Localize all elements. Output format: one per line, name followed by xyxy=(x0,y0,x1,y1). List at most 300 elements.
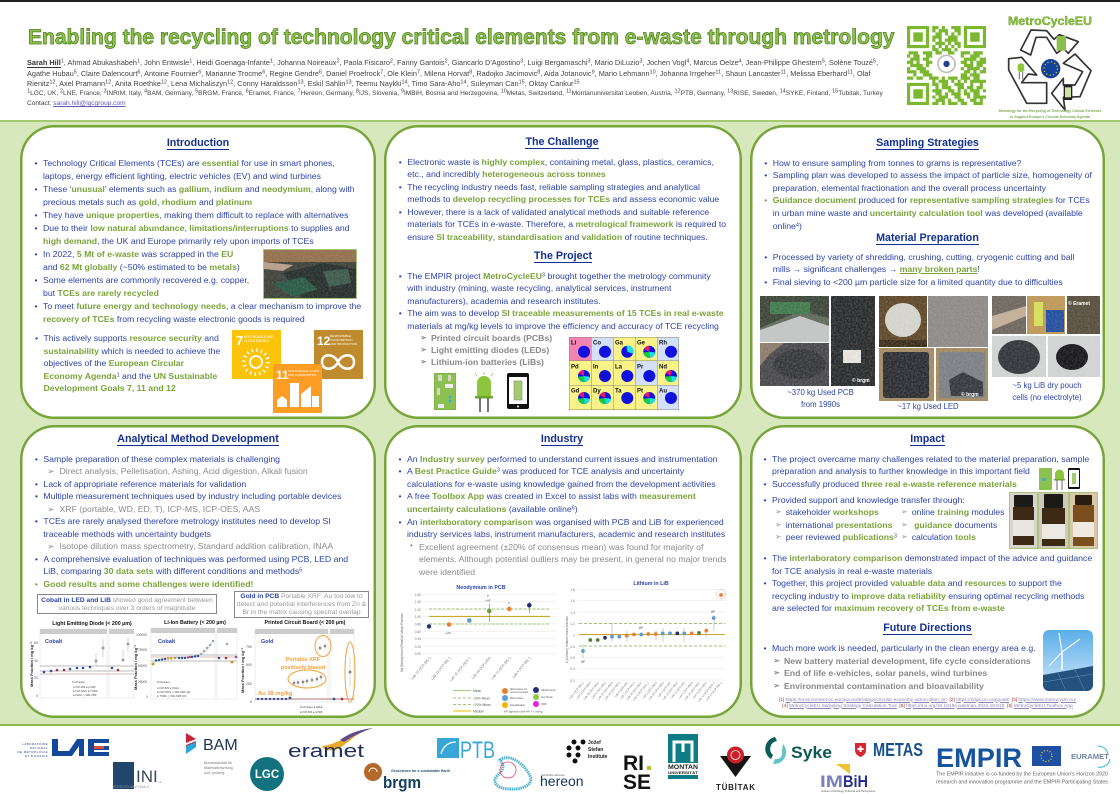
chart: lithium in LiB: 0.6 xyxy=(570,656,575,660)
text: method bullets: ➢ Isotope dilution mass spectrometry, Standard addition calibration, INAA xyxy=(47,541,333,551)
chart: neodymium in PCB: Lab 13 (ICP-MS 1 xyxy=(430,656,452,681)
text: sampling bullets: online4) xyxy=(773,221,802,231)
chart: lithium in LiB: Lab 21 (ICP-OES xyxy=(683,681,701,701)
text: introduction bullets: high demand, the UK and Europe primarily rely upon imports of TCEs xyxy=(43,236,314,246)
text: impact conclusions: recycling industry to improve data reliability ensuring optimal recycling methods xyxy=(772,591,1084,601)
logo: IMBiH: BiH xyxy=(843,772,868,791)
chart: PCB gold: 250 xyxy=(246,682,252,686)
caption: used PCB: from 1990s xyxy=(801,400,840,408)
text: introduction bullets: Technology Critical Elements (TCEs) are essential for use in smart phones, xyxy=(43,158,335,168)
logo: Montanuniversität Leoben: MONTAN xyxy=(668,764,699,771)
chart: LiB cobalt: Li-Ion Battery (< 200 µm) xyxy=(164,620,226,626)
chart: neodymium in PCB: 0.00 xyxy=(415,652,421,656)
chart: LiB cobalt: 25000 xyxy=(138,680,147,684)
text: method bullets: Multiple measurement techniques used by industry including portable devices xyxy=(43,491,341,501)
text: sustainability bullet: objectives of the European Circular xyxy=(44,358,184,368)
text: EMPIR funding statement xyxy=(936,772,1109,786)
chart: lithium in LiB: Lab 12 (ICP-OES 1 xyxy=(697,681,716,703)
panel: the challenge and the project xyxy=(384,125,742,419)
logo: INRIM: LE xyxy=(158,780,162,784)
text: impact conclusions: for TCE analysis in real e-waste materials xyxy=(772,566,932,576)
icon: SDG 7 xyxy=(232,330,281,379)
photos: LiB pouch cells: © Eramet xyxy=(1068,300,1090,307)
text: knowledge transfer list, second column: calculation tools xyxy=(912,532,976,542)
text: preparation bullets: mills → significant challenges → many broken parts! xyxy=(773,264,980,274)
chart: lithium in LiB: 1.6 xyxy=(570,599,575,603)
logo: Eramet xyxy=(288,728,373,761)
text: method bullets: A comprehensive evaluation of techniques was performed using PCB, LED and xyxy=(43,554,348,564)
chart: LED cobalt: 0 xyxy=(36,694,38,698)
text: preparation bullets: Final sieving to <200 µm particle size for a limited quantity due to difficulties xyxy=(773,277,1063,287)
text: impact bullets: The project overcame many challenges related to the material preparation, sample xyxy=(772,454,1089,464)
icon: LED xyxy=(474,372,494,412)
caption: LiB pouch cells: cells (no electrolyte) xyxy=(1012,392,1082,402)
chart: neodymium in PCB: Lab 11 (ICP-MS 1 xyxy=(490,656,512,680)
logo: INRIM: ISTITUTO NAZIONALE xyxy=(113,785,150,789)
logo: Jozef Stefan Institute: Institute xyxy=(588,754,608,760)
text: introduction bullets: Some elements are commonly recovered e.g. copper, xyxy=(43,274,249,284)
logo: hereon xyxy=(495,758,584,789)
chart: periodic table of pies: Gd xyxy=(571,388,580,394)
callout: cobalt: various techniques over 3 orders of magnitude xyxy=(59,604,195,612)
photo: wind turbine and solar panels xyxy=(1043,630,1093,691)
legend: neodymium chart: Microwave xyxy=(510,696,524,700)
chart: LED cobalt: Cobalt xyxy=(45,639,62,645)
text: sustainability bullet: This actively supports resource security and xyxy=(44,333,219,343)
chart: neodymium in PCB: Lab 4 (ICP-MS 1 xyxy=(511,656,532,679)
caption: used LED: ~17 kg Used LED xyxy=(897,402,959,411)
text: introduction bullets: These ‘unusual’ elements such as gallium, indium and neodymium, along with xyxy=(43,184,355,194)
text: sampling bullets: preparation, elemental fractionation and the overall process uncertainty xyxy=(773,183,1046,193)
logo: PTB xyxy=(437,737,495,764)
chart: lithium in LiB: 1 xyxy=(573,634,575,638)
chart: LED cobalt: ● INAA ◇ WD-XRF xyxy=(73,693,97,697)
chart: lithium in LiB: Lab 5 (ICP-OES xyxy=(590,681,607,700)
chart: neodymium in PCB: Neodymium in PCB xyxy=(456,585,506,591)
text: challenge bullets: etc., and incredibly heterogeneous across tonnes xyxy=(407,169,606,179)
text: EMPIR funding statement: research and innovation programme and the EMPIR Participating States xyxy=(936,780,1109,786)
text: industry bullets: uncertainty calculations (available online6) xyxy=(407,504,578,514)
chart: LED cobalt: ● ICP-OES ● TXRF xyxy=(73,689,98,693)
chart: neodymium in PCB: 0.40 xyxy=(415,637,421,641)
logo: BRGM: Geoscience for a sustainable Earth xyxy=(391,769,451,773)
chart: lithium in LiB: Lab 18 (ICP-OES xyxy=(582,681,600,701)
text: industry bullets xyxy=(398,454,727,577)
text: introduction bullets: and 62 Mt globally (~50% estimated to be metals) xyxy=(43,262,240,272)
text: project bullets: with industry (mining, waste recycling, analytical services, instrument xyxy=(407,283,671,293)
chart: LED cobalt: 60 xyxy=(34,641,38,645)
chart: PCB gold: Portable XRF xyxy=(286,657,321,663)
callout: gold: Br in the matrix causing spectral overlap xyxy=(242,609,361,616)
chart: lithium in LiB: Lab 1 (ICP-MS 2 xyxy=(619,681,636,700)
text: knowledge transfer list, second column: online training modules xyxy=(912,507,1004,517)
text: method bullets: ➢ XRF (portable, WD, ED, T), ICP-MS, ICP-OES, AAS xyxy=(47,504,260,514)
text: industry bullets: elements. Although potential outliers may be present, in general no major trends xyxy=(419,554,727,564)
heading: Future Directions: Future Directions xyxy=(883,622,972,634)
chart: LED cobalt: 20 xyxy=(34,676,38,680)
logo: IMBiH xyxy=(820,764,876,793)
logo: EMPIR xyxy=(936,743,1110,773)
charts: interlaboratory comparison xyxy=(400,581,726,714)
text: challenge bullets: methods to develop recycling processes for TCEs and assess economic value xyxy=(407,194,719,204)
text: future directions: New battery material development, life cycle considerations xyxy=(784,656,1031,666)
text: method bullets: Good results and some challenges were identified! xyxy=(43,579,253,589)
logo: Eramet: eramet xyxy=(288,741,364,761)
heading: Analytical Method Development: Analytical Method Development xyxy=(117,433,279,445)
chart: lithium in LiB: Lab 4 (ICP-MS 1 xyxy=(568,681,585,700)
chart: lithium in LiB: HF xyxy=(639,626,643,630)
heading: The Challenge: The Challenge xyxy=(525,136,599,148)
chart: lithium in LiB: Lab 12 (ICP-OES xyxy=(661,681,679,701)
chart: periodic table of pies: Co xyxy=(593,340,601,346)
chart: neodymium in PCB: +HF xyxy=(485,598,491,602)
text: sampling bullets: in urban mine waste and uncertainty calculation tool was developed (available xyxy=(773,208,1083,218)
chart: LiB cobalt: ● ICP-MS ● INAA xyxy=(157,686,179,690)
chart: neodymium in PCB: 1.20 xyxy=(415,608,421,612)
photos: used PCB xyxy=(760,296,875,386)
chart: LiB cobalt: Mass Fraction / mg kg⁻¹ xyxy=(133,644,138,690)
photos: LiB pouch cells xyxy=(992,296,1100,377)
chart: lithium in LiB: 1.2 xyxy=(570,622,575,626)
logo: BAM: Bundesanstalt für xyxy=(204,761,233,765)
legend: neodymium chart: Microwave as xyxy=(510,687,528,691)
text: method bullets: traceable methods with uncertainty budgets xyxy=(43,529,211,539)
text: introduction bullets xyxy=(34,158,361,324)
photo: reference material bottles xyxy=(1009,492,1098,549)
logo: LGC: LGC xyxy=(255,769,279,781)
logo: TUBITAK xyxy=(716,746,755,792)
chart: lithium in LiB: 0.2 xyxy=(570,679,575,683)
text: challenge bullets: The recycling industry needs fast, reliable sampling strategies and analytical xyxy=(407,182,700,192)
caption: LiB pouch cells: ~5 kg LiB dry pouch xyxy=(1012,381,1082,390)
chart: lithium in LiB: Lab 7 (ICP-MS xyxy=(656,681,672,698)
chart: neodymium in PCB: # xyxy=(487,594,489,598)
recycling arrows with EU circle xyxy=(1008,29,1092,111)
logo: hereon: Helmholtz-Zentrum xyxy=(541,773,565,777)
text: preparation bullets: Processed by variety of shredding, crushing, cutting, cryogenic cutting and ball xyxy=(773,252,1075,262)
chart: LED cobalt: ● ICP-MS ● μXRF xyxy=(73,685,96,689)
heading: Introduction: Introduction xyxy=(167,137,229,149)
text: introduction bullets: In 2022, 5 Mt of e-waste was scrapped in the EU xyxy=(43,248,233,258)
logo: Montanuniversität Leoben xyxy=(668,734,699,779)
title: Enabling the recycling of technology critical elements from e-waste through metrology xyxy=(28,26,894,49)
text: introduction bullets: recovery of TCEs from recycling waste electronic goods is required xyxy=(43,314,305,324)
text: impact bullets: Successfully produced three real e-waste reference materials xyxy=(772,479,1017,489)
logo: BAM: und -prüfung xyxy=(204,771,224,775)
text: impact conclusions: Together, this project provided valuable data and resources to support the xyxy=(772,578,1062,588)
MetroCycleEU logo xyxy=(998,14,1102,119)
text: method bullets: LiB, comparing 30 data sets with different conditions and methods5 xyxy=(43,566,302,576)
text: project bullets: The EMPIR project MetroCycleEU3 brought together the metrology community xyxy=(407,271,711,281)
legend: neodymium chart: recommended xyxy=(510,690,528,694)
chart: neodymium in PCB: 1.60 xyxy=(415,593,421,597)
text: impact conclusions: are selected for maximum recovery of TCEs from e-waste xyxy=(772,603,1005,613)
chart: LiB cobalt: 50000 xyxy=(138,664,147,668)
text: sustainability bullet: Economy Agenda1 and the UN Sustainable xyxy=(44,370,217,380)
chart: LED cobalt: Light Emitting Diode (< 200 µm) xyxy=(52,621,132,627)
callout: gold: detect and potential interferences from Zn & xyxy=(237,601,366,608)
heading: The Project: The Project xyxy=(534,250,592,262)
icon: SDG 11: SUSTAINABLE CITIES xyxy=(288,369,319,373)
text: project bullets: manufacturers), academia and research institutes. xyxy=(407,296,600,306)
text: knowledge transfer list, second column: guidance documents xyxy=(914,520,997,530)
text: impact conclusions: The interlaboratory comparison demonstrated impact of the advice and guidance xyxy=(772,553,1092,563)
caption: LiB pouch cells xyxy=(1012,381,1082,402)
chart: lithium in LiB: Lithium in LiB xyxy=(633,581,669,587)
logo: LNE: NATIONAL xyxy=(30,746,48,750)
text: knowledge transfer list, second column xyxy=(902,507,1004,542)
text: preparation bullets xyxy=(764,252,1075,287)
logo: RISE xyxy=(623,752,651,794)
logo: INRIM: INI xyxy=(136,767,158,786)
references: [1] https://environment.ec.europa.eu/strategy/circular-economy-action-plan_en [2] https://sdgs.un.org/goals [3] https://www.metrocycle.eu/ xyxy=(779,698,1076,702)
chart: LED cobalt: 40 xyxy=(34,659,38,663)
legend: neodymium chart: Hot block xyxy=(541,695,553,699)
chart: LiB cobalt: 75000 xyxy=(138,648,147,652)
logo: INRIM xyxy=(113,762,162,789)
text: method bullets: TCEs are rarely analysed therefore metrology institutes need to develop SI xyxy=(43,516,331,526)
text: introduction bullets: To meet future energy and technology needs, a clear mechanism to improve the xyxy=(43,300,361,310)
chart: PCB gold: Printed Circuit Board (< 200 µm) xyxy=(265,620,346,626)
callout: cobalt xyxy=(37,594,217,614)
text: material list: Lithium-ion batteries (LiBs) xyxy=(431,357,544,367)
authors and affiliations: 1LGC, UK, 2LNE, France, 3INRIM, Italy, 4BAM, Germany, 5BRGM, France, 6Eramet, France, 7Hereon, Germany, 8IJS, Slovenia, 9IMBiH, Bosnia and Herzegovina, 10Metas, Switzerland, 11Montanuniversitat Leoben, Austria, 12PTB, Germany, 13RISE, Sweden, 14SYKE, Finland, 15Tubitak, Turkey xyxy=(27,88,883,97)
photo: e-waste heap xyxy=(263,249,357,299)
chart: PCB gold: positively biased xyxy=(281,665,325,671)
chart: periodic table of pies: Ge xyxy=(637,340,646,346)
logo: RISE: SE xyxy=(623,771,651,794)
authors and affiliations: Contact: sarah.hill@lgcgroup.com xyxy=(27,100,126,107)
chart: PCB gold xyxy=(240,620,355,714)
text: knowledge transfer list, first column: peer reviewed publications3 xyxy=(786,532,897,542)
chart: periodic table of pies: Rh xyxy=(659,340,667,346)
chart: PCB gold: Mass Fraction / mg kg⁻¹ xyxy=(240,647,245,693)
chart: LiB cobalt xyxy=(133,620,237,699)
chart: lithium in LiB: Lab 10 (ICP-OES xyxy=(596,681,614,701)
authors and affiliations: Agathe Hubau5, Claire Dalencourt6, Antoine Fournier6, Marianne Trocme6, Regine Gendre6, Daniel Proefrock7, Ole Klein7, Milena Horvat8, Radojko Jacimovic8, Aida Jotanovic9, Mario Lehmann10, Johanna Irrgeher11, Shaun Lancaster11, Melissa Eberhard11, Olaf xyxy=(27,69,870,78)
text: industry bullets: A free Toolbox App was created in Excel to assist labs with measurement xyxy=(407,491,696,501)
panel: impact and future directions xyxy=(750,425,1105,718)
text: material list: Light emitting diodes (LEDs) xyxy=(431,345,549,355)
chart: LiB cobalt: Cobalt xyxy=(158,639,175,645)
chart: PCB gold: Gold xyxy=(261,639,274,645)
logo: LNE: LABORATOIRE xyxy=(22,742,48,746)
text: industry bullets: were identified xyxy=(419,567,475,577)
logo tagline: to Support Europe's Circular Economy Agenda xyxy=(1010,114,1090,118)
chart: periodic table of pies xyxy=(569,337,679,410)
text: introduction bullets: They have unique properties, making them difficult to replace with alternatives xyxy=(43,210,348,220)
text: introduction bullets: laptops, energy efficient lighting, electric vehicles (EV) and wind turbines xyxy=(43,170,321,180)
text: knowledge transfer list, first column xyxy=(776,507,897,542)
references: [4] MetroCycleEU Sampling Strategy Calculation Tool [5] https://doi.org/10.1016/j.wasman.2024.10.015 [6] MetroCycleEU Toolbox App xyxy=(782,704,1073,708)
chart: lithium in LiB: Lab 4 (ICP-OES xyxy=(691,681,708,700)
text: sampling bullets xyxy=(764,158,1092,231)
references xyxy=(750,698,1105,710)
chart: neodymium in PCB: +HF xyxy=(445,631,451,635)
chart: neodymium in PCB: Lab 13 (ICP-MS 1 xyxy=(410,656,432,681)
text: method bullets: Lack of appropriate reference materials for validation xyxy=(43,479,246,489)
text: sampling bullets: Sampling plan was developed to assess the impact of particle size, homogeneity of xyxy=(773,170,1092,180)
heading: Industry: Industry xyxy=(541,433,583,445)
text: method bullets: ➢ Direct analysis, Pelletisation, Ashing, Acid digestion, Alkali fusion xyxy=(47,466,308,476)
chart: neodymium in PCB: 0.20 xyxy=(415,645,421,649)
chart: periodic table of pies: Ga xyxy=(615,340,624,346)
legend: neodymium chart xyxy=(453,687,556,714)
text: industry bullets: Excellent agreement (±20% of consensus mean) was found for majority of xyxy=(419,542,703,552)
chart: periodic table of pies: Pr xyxy=(637,364,644,370)
chart: LiB cobalt: 100000 xyxy=(136,633,147,637)
text: future directions: Much more work is needed, particularly in the clean energy area e.g. xyxy=(772,643,1036,653)
logo: BAM: BAM xyxy=(203,737,238,754)
logo: BRGM xyxy=(364,763,451,792)
chart: neodymium in PCB: # xyxy=(508,601,510,605)
caption: used PCB xyxy=(787,388,854,408)
text: sustainability bullet: sustainability which is needed to achieve the xyxy=(44,346,220,356)
logo: IMBiH: Institute of Metrology of Bosnia and Herzegovina xyxy=(821,790,876,793)
footer: partner logos xyxy=(0,726,1120,794)
text: industry bullets: An interlaboratory comparison was organised with PCB and LiB for experienced xyxy=(407,517,724,527)
text: EMPIR funding statement: The EMPIR initiative is co-funded by the European Union's Horizon 2020 xyxy=(936,772,1108,778)
logo: Jozef Stefan Institute: Stefan xyxy=(588,747,603,753)
chart: lithium in LiB: Lab 13 (ICP-MS 1 xyxy=(705,681,723,701)
chart: LiB cobalt: ● ICP-OES ◇ WD-XRF (E) xyxy=(157,690,190,694)
chart: neodymium in PCB: 0.60 xyxy=(415,630,421,634)
chart: lithium in LiB: Lab 6 (ICP-OES 1 xyxy=(632,681,650,701)
text: challenge bullets xyxy=(399,157,726,242)
text: sustainability bullet xyxy=(35,333,220,393)
caption: used PCB: ~370 kg Used PCB xyxy=(787,388,854,397)
chart: LED cobalt xyxy=(29,621,134,698)
text: material list xyxy=(421,333,552,367)
chart: LED cobalt: Technique xyxy=(72,680,85,684)
chart: PCB gold: Technique ● INAA xyxy=(300,705,323,709)
logo: IMBiH: IM xyxy=(820,772,843,791)
text: impact bullets xyxy=(764,454,1089,505)
logo: EMPIR: EMPIR xyxy=(936,743,1022,773)
chart: periodic table of pies: Nd xyxy=(659,364,667,370)
icon: SDG 7: 7 xyxy=(236,333,243,348)
top edge bar xyxy=(0,0,1120,2)
text: introduction bullets: Due to their low natural abundance, limitations/interruptions to supplies and xyxy=(43,222,350,232)
icon: SDG 11 xyxy=(273,364,322,413)
chart: neodymium in PCB: 1.40 xyxy=(415,600,421,604)
text: challenge bullets: ensure SI traceability, standardisation and validation of routine techniques. xyxy=(407,232,708,242)
authors and affiliations: Rienitz12, Axel Pramann12, Anita Roethke12, Lena Michaliszyn12, Conny Haraldsson13, Eskil Sahlin13, Teemu Naykki14, Timo Sara-Aho14, Suleyman Can15, Oktay Cankur15 xyxy=(27,78,580,88)
logo tagline xyxy=(998,108,1102,119)
logo: TUBITAK: TÜBİTAK xyxy=(716,783,755,792)
text: method bullets: Sample preparation of these complex materials is challenging xyxy=(43,454,280,464)
chart: periodic table of pies: Li xyxy=(571,340,577,346)
panel: analytical method development xyxy=(20,425,376,718)
logo: RISE: RI xyxy=(623,752,644,775)
chart: lithium in LiB: k [Lithium] relative mass fraction xyxy=(565,616,569,663)
logo: hereon: hereon xyxy=(540,773,584,789)
panel: sampling strategies and material preparation xyxy=(750,125,1105,419)
logo: Syke xyxy=(765,737,832,764)
chart: neodymium in PCB: 0.80 xyxy=(415,622,421,626)
icon: SDG 11: 11 xyxy=(276,368,289,382)
callout: cobalt: Cobalt in LED and LiB showed good agreement between xyxy=(41,596,213,604)
legend: neodymium chart: -20% Mean xyxy=(473,696,490,700)
legend: neodymium chart: Mean xyxy=(473,689,481,693)
legend: neodymium chart: Equalisation xyxy=(510,703,526,707)
chart: LiB cobalt: ● TXRF ◇ WD-XRF (D) xyxy=(157,694,186,698)
icon: SDG 11: AND COMMUNITIES xyxy=(288,373,316,377)
chart: neodymium in PCB: Lab 18 (ICP-OES xyxy=(471,656,492,680)
chart: PCB gold: Au 38 mg/kg xyxy=(258,691,293,697)
photos: used LED: © brgm xyxy=(961,391,979,398)
chart: neodymium in PCB xyxy=(400,585,557,682)
logo: PTB: PTB xyxy=(460,737,495,764)
chart: lithium in LiB: Lab 2 (ICP-OES xyxy=(641,681,658,700)
logo wordmark: MetroCycleEU xyxy=(1008,14,1092,28)
chart: periodic table of pies: Pd xyxy=(571,364,579,370)
chart: periodic table of pies: In xyxy=(593,364,599,370)
legend: neodymium chart: Alkali fusion xyxy=(541,688,556,692)
text: future directions: End of life e-vehicles, solar panels, wind turbines xyxy=(784,668,987,678)
QR code xyxy=(907,26,986,105)
chart: periodic table of pies: Pt xyxy=(637,388,643,394)
text: project bullets: The aim was to develop SI traceable measurements of 15 TCEs in real e-waste xyxy=(407,308,724,318)
logo: LNE: ET D'ESSAIS xyxy=(25,754,48,758)
logo: EMPIR: EURAMET xyxy=(1071,754,1110,761)
text: introduction bullets: precious metals such as gold, rhodium and platinum xyxy=(43,196,252,206)
chart: periodic table of pies: Dy xyxy=(593,388,601,394)
chart: periodic table of pies: Ta xyxy=(615,388,622,394)
text: introduction bullets: but TCEs are rarely recycled xyxy=(43,288,159,298)
chart: neodymium in PCB: Lab 15 (ICP-OES 1 xyxy=(449,656,472,682)
icon: SDG 7: CLEAN ENERGY xyxy=(244,339,271,343)
text: sampling bullets: Guidance document produced for representative sampling strategies for TCEs xyxy=(773,195,1090,205)
chart: periodic table of pies: La xyxy=(615,364,623,370)
callout: gold: Gold in PCB Portable XRF: Au too low to xyxy=(240,593,363,600)
chart: PCB gold: 750 xyxy=(246,645,252,649)
text: project bullets xyxy=(399,271,724,331)
charts: mass fraction comparison xyxy=(29,620,356,714)
text: impact bullets: preparation and analysis to further knowledge in this important field xyxy=(772,466,1030,476)
chart: lithium in LiB: Lab 1 (ICP-OES xyxy=(677,681,694,700)
text: project bullets: materials at mg/kg levels to improve the efficiency and accuracy of TCE recycling xyxy=(407,321,719,331)
logo: METAS: METAS xyxy=(873,740,923,760)
text: future directions xyxy=(772,642,1036,692)
logo: BRGM: brgm xyxy=(383,773,421,792)
heading: Sampling Strategies: Sampling Strategies xyxy=(876,137,979,149)
text: material list: Printed circuit boards (PCBs) xyxy=(431,333,552,343)
text: impact bullets: Provided support and knowledge transfer through: xyxy=(772,495,965,505)
chart: neodymium in PCB: Nd [Neodymium] Relative Mass Fraction xyxy=(400,613,404,672)
text: sustainability bullet: Development Goals 7, 11 and 12 xyxy=(44,383,176,393)
text: sampling bullets: How to ensure sampling from tonnes to grams is representative? xyxy=(773,158,1021,168)
chart: LiB cobalt: 0 xyxy=(146,695,148,699)
icon: SDG 12 xyxy=(314,330,363,379)
icon: SDG 12: 12 xyxy=(317,334,331,348)
logo tagline: Metrology for the Recycling of Technology Critical Elements xyxy=(999,108,1101,112)
logo: Montanuniversität Leoben: UNIVERSITÄT xyxy=(668,770,699,775)
chart: lithium in LiB: Lab 14 (ICP-OES xyxy=(603,681,621,701)
chart: LiB cobalt: Technique xyxy=(157,680,170,684)
heading: Material Preparation: Material Preparation xyxy=(876,232,979,244)
chart: lithium in LiB: 1.8 xyxy=(570,588,575,592)
icon: SDG 12: CONSUMPTION xyxy=(330,338,352,342)
logo: BAM xyxy=(186,733,238,775)
icon: phone battery xyxy=(507,373,529,409)
text: industry bullets: industry services labs, instrument manufacturers, academic and research institutes xyxy=(407,529,725,539)
chart: lithium in LiB xyxy=(565,581,726,703)
icon: SDG 12: AND PRODUCTION xyxy=(330,342,357,346)
text: challenge bullets: However, there is a lack of validated analytical methods and suitable reference xyxy=(407,207,709,217)
panel: introduction xyxy=(20,125,376,419)
sub-bullet marker: • xyxy=(410,541,413,550)
